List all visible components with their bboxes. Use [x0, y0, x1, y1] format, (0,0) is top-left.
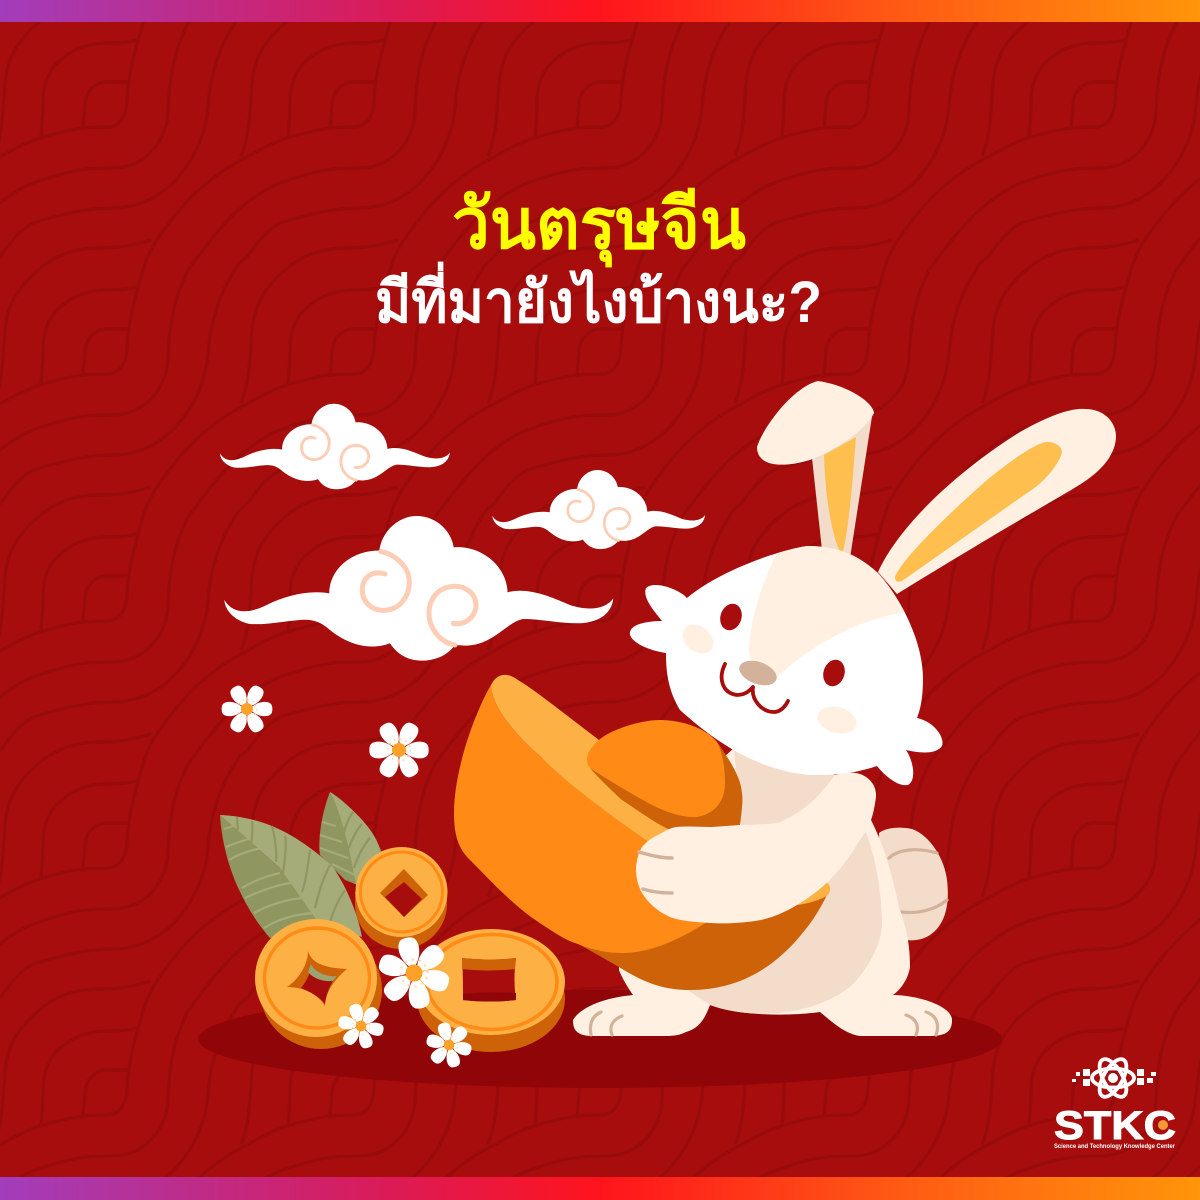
cloud: top left [220, 404, 450, 489]
coin: top [355, 847, 448, 949]
logo: STKC [1054, 1055, 1176, 1150]
subtitle: มีที่มายังไงบ้างนะ? [375, 261, 822, 335]
rabbit head [630, 540, 943, 785]
rabbit tail [879, 828, 948, 940]
rabbit body [573, 748, 952, 1036]
cloud: top right [492, 470, 705, 549]
logo dot [1158, 1120, 1168, 1130]
flower: bottom left [334, 999, 388, 1053]
rabbit arm [636, 773, 876, 923]
eyes [717, 601, 745, 633]
logo wordmark: STKC [1054, 1104, 1176, 1148]
chest [734, 748, 835, 826]
logo tagline: Science and Technology Knowledge Center [1054, 1144, 1176, 1150]
nose [736, 656, 780, 690]
coin: right [417, 929, 565, 1052]
flower: bottom right [421, 1017, 477, 1073]
rabbit back ear [757, 381, 874, 558]
gold ingot [454, 675, 830, 990]
mouth [722, 664, 788, 712]
cloud: large [224, 516, 613, 661]
flower: upper left [222, 683, 272, 735]
head patch [749, 546, 905, 677]
leaves [220, 792, 385, 938]
cheeks [677, 618, 719, 660]
bottom gradient bar [0, 1177, 1200, 1200]
rabbit front ear [878, 409, 1116, 594]
top gradient bar [0, 0, 1200, 22]
ground shadow [198, 990, 1002, 1088]
title: วันตรุษจีน [452, 185, 746, 268]
flower: upper right [369, 720, 429, 780]
rabbit [454, 381, 1116, 1036]
foot toes [590, 1012, 938, 1035]
coin: left [255, 919, 382, 1049]
logo pixel squares [1072, 1069, 1156, 1086]
logo atom icon [1092, 1055, 1134, 1101]
flower: centre large [369, 927, 459, 1019]
belly [680, 832, 882, 1014]
